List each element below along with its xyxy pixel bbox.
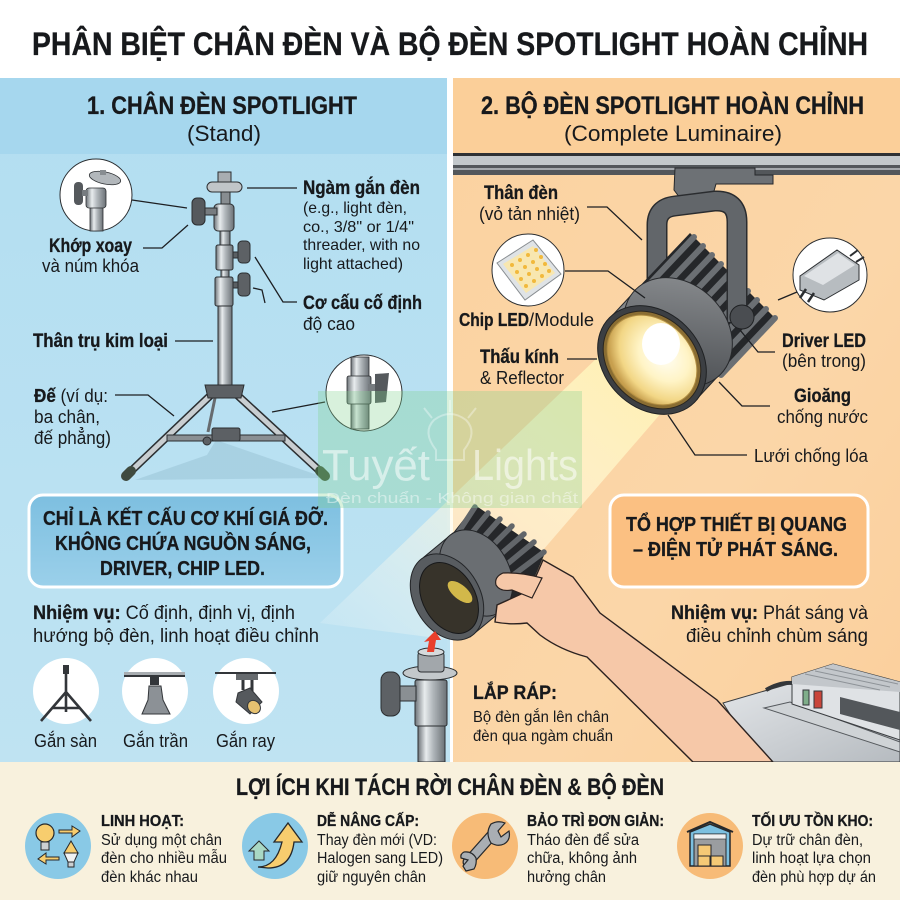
labels: luminaire: /Module — [529, 310, 594, 330]
heading: benefits: LỢI ÍCH KHI TÁCH RỜI CHÂN ĐÈN & BỘ ĐÈN — [236, 773, 664, 801]
labels: stand — [33, 177, 422, 448]
watermark: Tuyết — [322, 441, 430, 490]
labels: stand: Ngàm gắn đèn — [303, 177, 420, 199]
callout: stand: CHỈ LÀ KẾT CẤU CƠ KHÍ GIÁ ĐỠ. — [43, 506, 328, 530]
text: upgrade — [317, 812, 443, 886]
panel: benefits — [0, 762, 900, 900]
labels: stand: co., 3/8" or 1/4" — [303, 219, 414, 236]
heading: stand: 1. CHÂN ĐÈN SPOTLIGHT — [87, 90, 357, 120]
track adapter — [674, 168, 773, 198]
heat sink body — [636, 233, 775, 375]
labels: stand: Khớp xoay — [49, 236, 132, 257]
callout: luminaire: TỔ HỢP THIẾT BỊ QUANG — [626, 512, 847, 536]
text: stand task: hướng bộ đèn, linh hoạt điều chỉnh — [33, 626, 319, 647]
heading: luminaire: (Complete Luminaire) — [564, 121, 782, 146]
text: assembly: LẮP RÁP: — [473, 682, 557, 704]
inset: LED chip — [492, 234, 564, 306]
heading: luminaire — [481, 90, 864, 146]
icon: track mount — [213, 658, 279, 724]
lens — [589, 297, 715, 423]
text: assembly: Bộ đèn gắn lên chân — [473, 709, 609, 726]
text: warehouse: đèn phù hợp dự án — [752, 869, 876, 886]
callout: luminaire: – ĐIỆN TỬ PHÁT SÁNG. — [633, 537, 838, 561]
labels: stand: (e.g., light đèn, — [303, 200, 407, 217]
labels: luminaire: (bên trong) — [782, 351, 866, 371]
panel: stand background — [0, 78, 450, 762]
text: upgrade: giữ nguyên chân — [317, 869, 426, 886]
labels: stand: Đế (ví dụ: — [34, 386, 108, 406]
arm — [495, 560, 773, 762]
callout: stand — [29, 495, 342, 587]
text: assembly: đèn qua ngàm chuẩn — [473, 728, 613, 745]
labels: stand: Cơ cấu cố định — [303, 293, 422, 314]
text: warehouse: linh hoạt lựa chọn — [752, 850, 871, 867]
leader lines: stand — [115, 188, 325, 416]
labels: luminaire: Chip LED — [459, 310, 529, 330]
inset: swivel joint — [60, 159, 132, 231]
lens glow — [444, 577, 476, 607]
yoke front arm — [726, 232, 748, 322]
band — [424, 517, 528, 637]
labels: stand: độ cao — [303, 314, 355, 334]
text: assembly — [473, 682, 613, 745]
labels: luminaire: Thân đèn — [484, 183, 558, 204]
labels: luminaire: chống nước — [777, 407, 868, 427]
watermark — [318, 391, 582, 508]
labels: luminaire: Thấu kính — [480, 347, 559, 368]
illustration: spotlight luminaire — [576, 168, 775, 436]
text: flexible: đèn cho nhiều mẫu — [101, 850, 227, 867]
text: warehouse: Dự trữ chân đèn, — [752, 832, 863, 849]
inset: LED driver — [793, 238, 867, 312]
leader lines: luminaire — [565, 207, 797, 455]
text: warehouse: TỐI ƯU TỒN KHO: — [752, 812, 873, 830]
callout: stand: KHÔNG CHỨA NGUỒN SÁNG, — [55, 531, 311, 555]
labels: stand: light attached) — [303, 256, 403, 273]
labels: luminaire: Gioăng — [794, 386, 851, 407]
icon: ceiling mount — [122, 658, 188, 724]
bezel — [576, 284, 728, 436]
hot spot — [642, 323, 680, 365]
labels: mount types: Gắn ray — [216, 730, 275, 751]
labels: mount types — [34, 730, 275, 751]
labels: luminaire — [459, 183, 869, 466]
mesh — [407, 552, 491, 644]
text: warehouse — [752, 812, 876, 886]
labels: stand: threader, with no — [303, 237, 420, 254]
yoke — [657, 201, 737, 322]
illustration: ceiling track — [453, 153, 900, 175]
labels: stand: và núm khóa — [42, 256, 140, 276]
text: maintenance: Tháo đèn để sửa — [527, 832, 639, 849]
icon: upgrade — [242, 813, 308, 879]
labels: mount types: Gắn sàn — [34, 730, 97, 751]
text: maintenance: hưởng chân — [527, 869, 606, 886]
text: upgrade: Halogen sang LED) — [317, 850, 443, 867]
text: maintenance: BẢO TRÌ ĐƠN GIẢN: — [527, 813, 664, 830]
watermark: Đèn chuẩn - Không gian chất — [326, 490, 579, 507]
panel: complete luminaire background — [453, 78, 900, 762]
icon: maintenance — [452, 813, 518, 879]
labels: stand: ba chân, — [34, 407, 100, 427]
inset: height lock — [326, 355, 402, 431]
text: flexible — [101, 813, 227, 886]
heading: stand: (Stand) — [187, 121, 261, 146]
illustration: device on table — [723, 664, 900, 762]
labels: luminaire: Lưới chống lóa — [754, 446, 869, 466]
labels: luminaire: (vỏ tản nhiệt) — [479, 204, 580, 224]
text: maintenance: chữa, không ảnh — [527, 850, 637, 867]
fins — [453, 505, 545, 605]
text: flexible: Sử dụng một chân — [101, 832, 222, 849]
text: luminaire task — [671, 603, 868, 647]
labels: luminaire: & Reflector — [480, 368, 564, 388]
lens ring — [583, 291, 721, 429]
bezel — [395, 541, 499, 653]
icon: floor mount — [33, 658, 99, 724]
text: stand task: Nhiệm vụ: Cố định, định vị, định — [33, 603, 295, 624]
labels: stand: đế phẳng) — [34, 427, 111, 448]
illustration: stand head with arrow — [381, 631, 457, 762]
illustration: hand holding lamp — [395, 505, 773, 762]
text: luminaire task: điều chỉnh chùm sáng — [686, 626, 868, 647]
icon: flexible — [25, 813, 91, 879]
yoke knob — [730, 305, 754, 329]
labels: stand: Thân trụ kim loại — [33, 331, 168, 352]
heading: stand — [87, 90, 357, 146]
text: flexible: đèn khác nhau — [101, 869, 198, 886]
arrow: assembly direction — [424, 631, 441, 652]
text: flexible: LINH HOẠT: — [101, 813, 184, 830]
labels: mount types: Gắn trần — [123, 730, 188, 751]
callout: luminaire — [610, 495, 868, 587]
front band — [602, 256, 754, 408]
light beam — [320, 357, 662, 640]
text: stand task — [33, 603, 319, 647]
labels: luminaire: Driver LED — [782, 331, 866, 352]
text: upgrade: Thay đèn mới (VD: — [317, 832, 437, 849]
icon: warehouse — [677, 813, 743, 879]
illustration: light stand — [126, 172, 326, 480]
text: luminaire task: Nhiệm vụ: Phát sáng và — [671, 603, 868, 624]
callout: stand: DRIVER, CHIP LED. — [100, 558, 265, 580]
text: maintenance — [527, 813, 664, 886]
watermark: Lights — [472, 441, 578, 490]
thumb — [496, 573, 542, 598]
text: upgrade: DỄ NÂNG CẤP: — [317, 812, 419, 830]
